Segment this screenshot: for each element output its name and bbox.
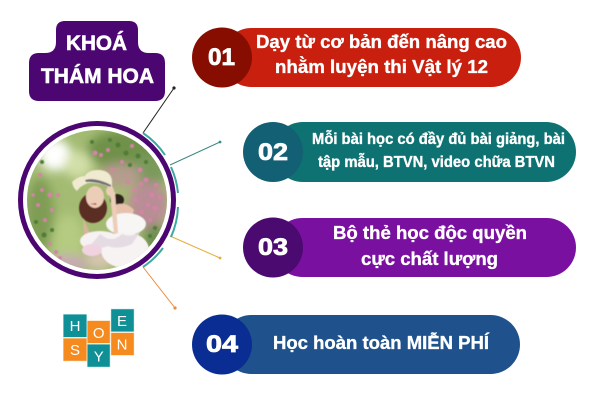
connector arrow to item 01	[143, 86, 176, 133]
text 04: Học hoàn toàn MIỄN PHÍ	[273, 332, 490, 353]
portrait photo: woman in white hat among blossoms	[26, 130, 168, 273]
block O: O	[93, 325, 105, 342]
number circle 02	[243, 122, 303, 182]
title badge: Khoá Thám Hoa	[29, 21, 165, 101]
text 02: Mỗi bài học có đầy đủ bài giảng, bài	[312, 131, 565, 148]
connector arrow to item 04	[143, 267, 177, 310]
number circle 04: 04	[206, 331, 239, 358]
number circle 01: 01	[208, 44, 235, 71]
number circle 03	[243, 218, 303, 278]
text 02	[312, 131, 565, 171]
pill 04	[222, 315, 520, 374]
item 01	[192, 28, 521, 88]
number circle 04	[192, 314, 252, 374]
number circle 01	[192, 28, 252, 88]
text 01: Dạy từ cơ bản đến nâng cao	[256, 31, 507, 52]
logo: HOSYEN letter blocks	[63, 309, 134, 367]
text 02: tập mẫu, BTVN, video chữa BTVN	[318, 154, 555, 171]
pill 02	[273, 122, 576, 182]
block N: N	[117, 336, 127, 354]
pill 01	[222, 28, 521, 87]
block Y: Y	[94, 348, 104, 366]
item 04	[192, 314, 520, 374]
portrait ring	[20, 124, 174, 276]
pill 03	[273, 218, 576, 277]
connector arrow to item 03	[170, 236, 221, 259]
item 02	[243, 122, 576, 182]
block S: S	[70, 342, 80, 359]
text 03: cực chất lượng	[361, 248, 498, 269]
teal arc segments around the portrait	[143, 133, 178, 267]
block H: H	[70, 318, 80, 335]
text 03	[333, 222, 527, 269]
number circle 02: 02	[258, 139, 288, 166]
block E: E	[117, 313, 127, 330]
item 03	[243, 218, 576, 278]
title badge: Khoá Thám Hoa: KHOÁ	[66, 32, 127, 55]
text 03: Bộ thẻ học độc quyền	[333, 222, 527, 243]
text 01: nhằm luyện thi Vật lý 12	[275, 56, 488, 77]
connector arrow to item 02	[170, 141, 221, 165]
text 01	[256, 31, 507, 77]
title badge: Khoá Thám Hoa: THÁM HOA	[41, 65, 154, 88]
number circle 03: 03	[258, 234, 288, 261]
woman figure	[72, 170, 149, 268]
